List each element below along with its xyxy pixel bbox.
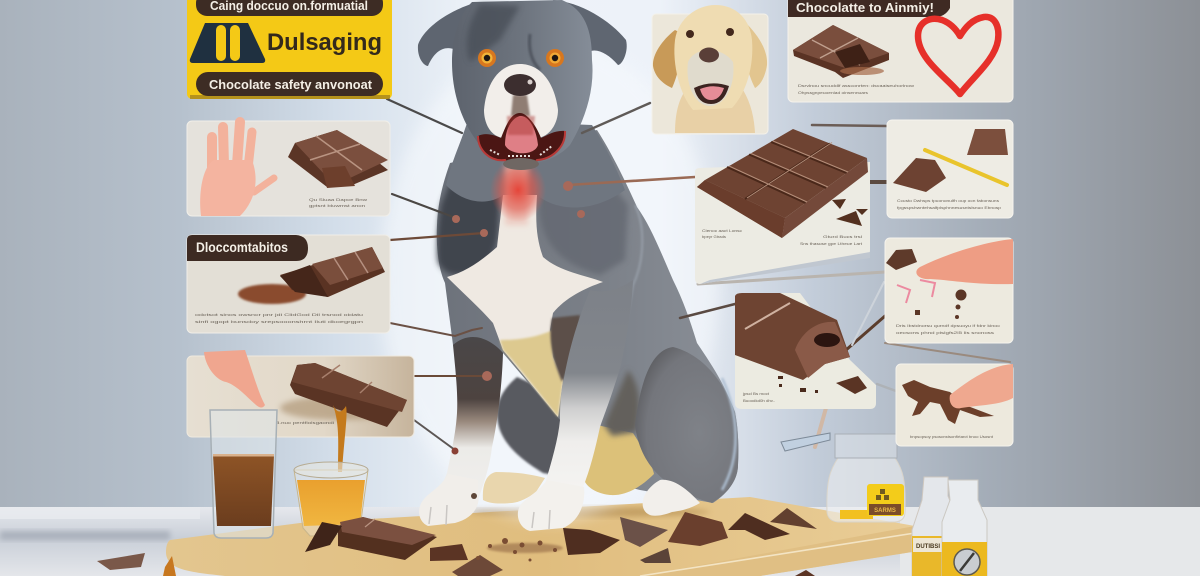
captions: Sns thasuse gpe Ltheue Lart xyxy=(800,241,863,246)
caption: jpscl Bs moct xyxy=(742,391,770,396)
captions xyxy=(702,228,863,246)
medicine bottles: DUTIBSI xyxy=(916,544,940,550)
ear right xyxy=(553,0,627,65)
table surface xyxy=(0,507,1200,576)
chocolate bar xyxy=(793,25,889,78)
panel: chocolate and heart xyxy=(788,0,1013,102)
golden dog xyxy=(653,5,767,133)
right front leg xyxy=(545,280,633,487)
crumbs pile xyxy=(238,284,306,304)
chocolate bar xyxy=(288,130,388,188)
caption: fpgsspshwntehsalfplsphnnesusntslsnuo Ebnosp xyxy=(897,205,1002,210)
neck xyxy=(446,120,625,208)
ear left xyxy=(418,2,478,66)
chocolate bar xyxy=(697,129,868,238)
chocolate piece xyxy=(886,249,917,270)
icon: raised hand xyxy=(200,122,274,216)
cutting board xyxy=(166,497,915,576)
caption xyxy=(897,198,1002,210)
caption xyxy=(896,323,1000,335)
caption: gptsnt bluwmst anon xyxy=(309,203,365,208)
chocolate bar broken xyxy=(280,247,385,297)
medicine bottles xyxy=(912,477,987,576)
caption xyxy=(742,391,775,403)
brown shadow under chest xyxy=(550,315,580,382)
panel: fingers with chocolate xyxy=(885,238,1013,343)
melted chocolate drip xyxy=(333,405,347,472)
caption: Dsrvlnou sncuddlf assconrten: dsvaaiseuhorlnow xyxy=(798,83,914,88)
connector lines xyxy=(387,99,1010,450)
crumbs xyxy=(778,376,818,393)
far hind leg xyxy=(497,377,570,476)
caption xyxy=(195,312,363,324)
caption: odctsot sinos owsncr pnr jdi ClidGod Dil trsnod oidatu xyxy=(195,312,363,317)
left front leg xyxy=(440,337,503,500)
chest fur xyxy=(675,85,755,133)
cream belly xyxy=(585,425,654,495)
right chest shade xyxy=(539,170,628,275)
panel: brown dog and hand xyxy=(896,364,1013,446)
captions: bpeyr Gtrads xyxy=(702,234,726,239)
shadow between leg and hip xyxy=(604,370,639,436)
left front paw xyxy=(419,474,479,526)
glow behind dog xyxy=(380,40,720,520)
panel: chocolate pieces and pencil xyxy=(887,120,1013,218)
caption: oecsons phnd pislgfs2l5 lis sncnoss xyxy=(896,330,994,335)
icon: hand xyxy=(916,239,1013,284)
icon: hand xyxy=(204,350,265,408)
captions: Clenoc aact Lonsc xyxy=(702,228,742,233)
caption: Qu Sluaa Dapce Bnw xyxy=(309,197,367,202)
bottom pill label: Chocolate safety anvonoat xyxy=(209,77,373,92)
head xyxy=(418,0,627,170)
glass jar xyxy=(781,433,905,522)
panel: large chocolate bar xyxy=(695,129,870,284)
pencil xyxy=(925,150,1007,185)
caption xyxy=(798,83,914,95)
muzzle xyxy=(687,50,733,106)
right eye xyxy=(546,49,564,67)
back left paw xyxy=(483,472,545,504)
mouth xyxy=(478,113,565,168)
yellow chest lower xyxy=(500,330,563,417)
chocolate shard xyxy=(836,376,867,394)
nose xyxy=(504,74,536,96)
tongue xyxy=(505,116,538,153)
right ear xyxy=(738,22,767,88)
shadow xyxy=(280,396,400,420)
chin xyxy=(503,158,539,170)
pink splash xyxy=(897,280,935,303)
panel: stop hand and chocolate xyxy=(187,121,390,216)
caption: Ohpssgnpeuoenlad oinsennuars xyxy=(798,90,868,95)
left chest dark patch xyxy=(437,170,500,275)
panel: bitten chocolate bar xyxy=(735,293,876,409)
small glass of honey xyxy=(294,462,368,536)
icon: hand xyxy=(950,364,1013,408)
caption xyxy=(309,197,367,208)
chocolate wedge right xyxy=(967,129,1008,155)
pill heading xyxy=(187,235,308,261)
panel: hand with melting bar xyxy=(187,350,414,437)
icon: no symbol xyxy=(954,549,980,575)
body xyxy=(437,130,738,503)
dog illustration xyxy=(380,0,738,531)
caption: Buoodkd0h dhv.. xyxy=(743,398,775,403)
back right paw xyxy=(643,480,700,516)
left eye xyxy=(478,49,496,67)
skull xyxy=(452,0,593,164)
pill heading: Chocolatte to Ainmiy! xyxy=(796,0,934,15)
chocolate bar xyxy=(290,363,407,427)
icon: red heart xyxy=(918,17,998,94)
chocolate pieces on board xyxy=(97,508,817,576)
caption: Dris Ibstdnorsu qurndf dpsuoyu if fdnr kinoc xyxy=(896,323,1000,328)
big bar xyxy=(338,517,437,560)
chocolate bar xyxy=(735,293,850,380)
right front paw xyxy=(518,480,584,531)
left ear xyxy=(653,30,685,88)
tall glass of tea xyxy=(210,410,277,538)
crumbs xyxy=(915,290,966,319)
hind leg hip xyxy=(635,347,738,503)
shoulder highlight xyxy=(612,205,642,380)
panel: discomfort crumbs xyxy=(187,235,390,333)
caption: bnpsopsoy psoscnstsonfirtarct bnoo Usosnt xyxy=(910,434,994,439)
chocolate wedge left xyxy=(893,158,946,192)
white chest xyxy=(447,195,603,417)
panel: yellow dosage warning xyxy=(187,0,392,99)
face xyxy=(674,5,752,110)
caption: Ccusto Dwhsps tpuononulfh oup ocn fabonsuns xyxy=(897,198,999,203)
crumbs xyxy=(476,538,563,562)
chocolate shards xyxy=(832,199,868,226)
small brown dog xyxy=(902,380,994,424)
warning trapezoid icon xyxy=(190,23,265,63)
caption: 3.nuc pentfiolsgaondi xyxy=(276,420,334,425)
muzzle xyxy=(484,64,558,138)
pin marks on dog xyxy=(452,181,585,454)
jar label: SARMS xyxy=(874,508,896,514)
caption: sinfi ogopt bunsdoy srepsooonshrnt Iluti dkoegrgpn xyxy=(195,319,363,324)
heading: dosage: Dulsaging xyxy=(267,29,382,56)
captions: Gturd Bucs trsl xyxy=(823,234,862,239)
pill heading: Dloccomtabitos xyxy=(196,239,288,255)
bottom pill label xyxy=(196,72,383,96)
panel: golden retriever photo xyxy=(652,5,768,134)
